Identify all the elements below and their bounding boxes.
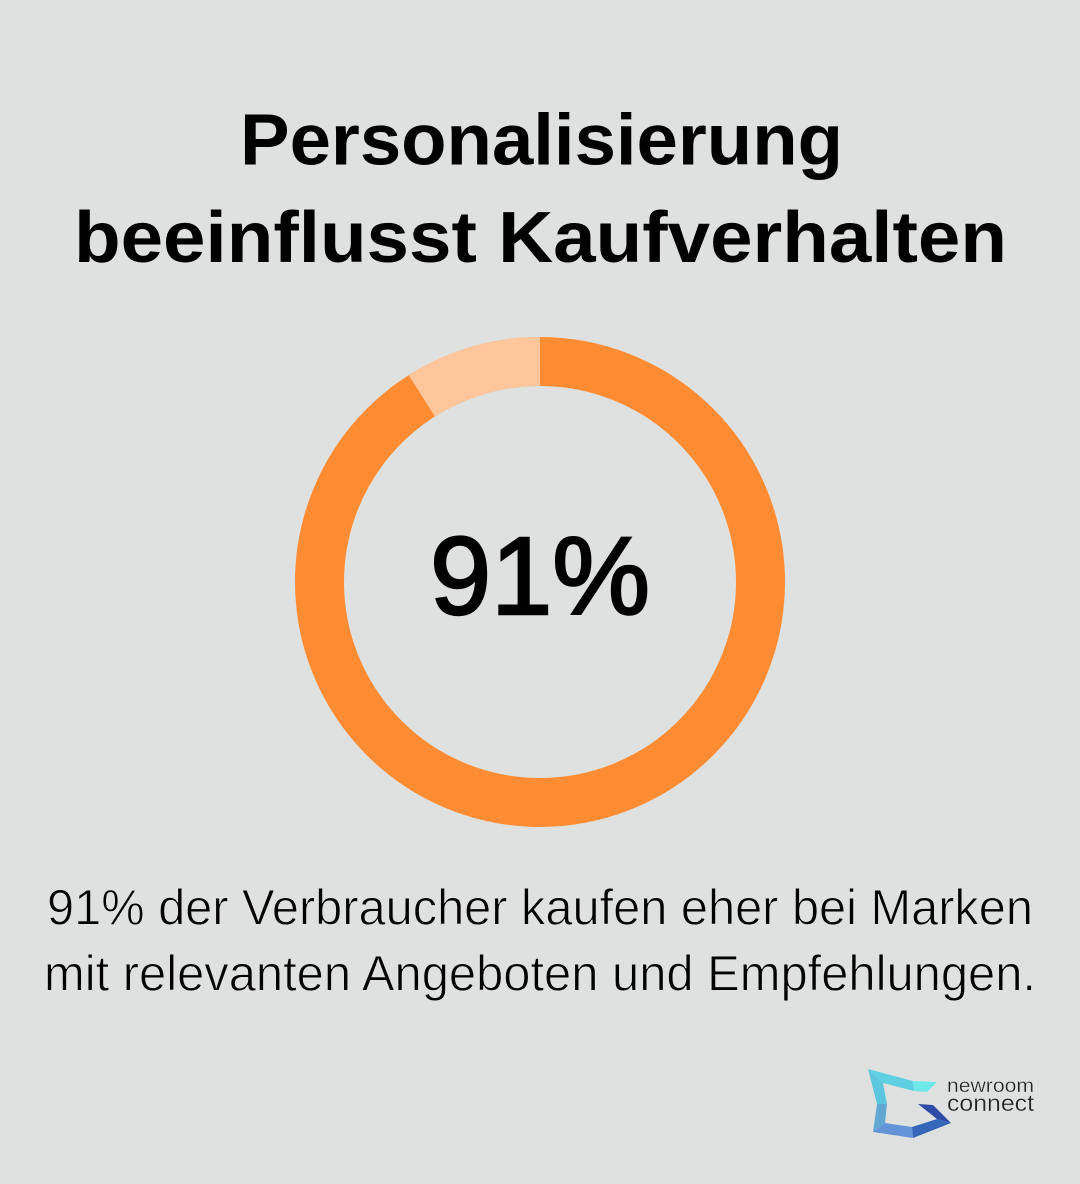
logo wordmark: [947, 1075, 1035, 1116]
logo wordmark: connect: [947, 1090, 1035, 1116]
logo: newroom connect: [868, 1069, 1035, 1138]
description text: mit relevanten Angeboten und Empfehlungen.: [44, 946, 1036, 1002]
title: beeinflusst Kaufverhalten: [74, 198, 1007, 278]
title: [74, 100, 1007, 278]
description text: [44, 880, 1036, 1002]
logo wordmark: newroom: [947, 1075, 1034, 1097]
icon: logo mark: [868, 1069, 951, 1138]
description text: 91% der Verbraucher kaufen eher bei Marken: [47, 880, 1033, 936]
donut chart: 91%: [320, 362, 760, 802]
title: Personalisierung: [240, 100, 843, 180]
donut centre value: 91%: [430, 515, 650, 638]
